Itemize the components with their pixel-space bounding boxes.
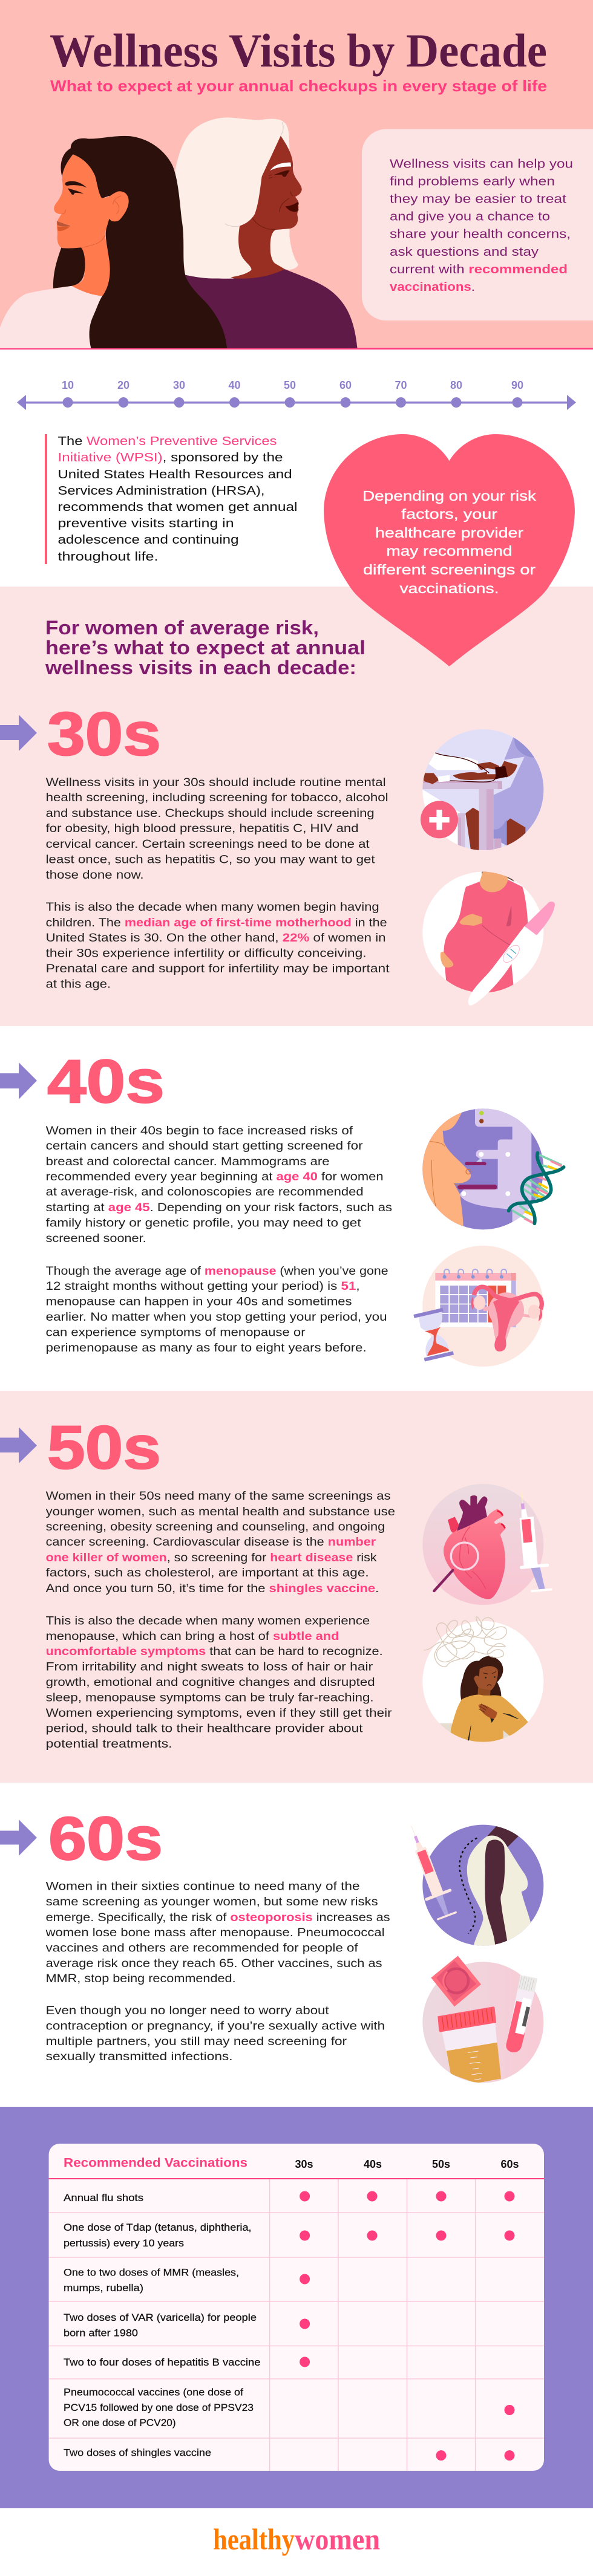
table row labels (64, 2193, 261, 2459)
table row labels: Annual flu shots (64, 2193, 143, 2204)
text block: WPSI recommendation: throughout life. (58, 550, 159, 564)
table row labels: Pneumococcal vaccines (one dose of (64, 2387, 243, 2398)
heading: women of average risk: wellness visits in each decade: (45, 657, 356, 678)
timeline: ages 10 to 90: 50 (284, 379, 296, 391)
text block: 50s paragraph 1: screening, obesity screening and counseling, and ongoing (46, 1521, 385, 1534)
callout panel: wellness visits intro: they may be easier to treat (390, 192, 566, 206)
callout panel: wellness visits intro: and give you a chance to (390, 210, 550, 224)
text block: WPSI recommendation: The Women’s Preventive Services (58, 435, 277, 448)
text block: 60s paragraph 1: vaccines and others are recommended for people of (46, 1942, 358, 1954)
background: intro pink band and 30s section (0, 587, 593, 1026)
text block: 30s paragraph 2 (46, 901, 390, 990)
text block: 60s paragraph 2: contraception or pregnancy, if you’re sexually active with (46, 2020, 385, 2033)
logo: healthywomen (213, 2522, 380, 2556)
background: hero bottom stripe (0, 348, 593, 350)
callout panel: wellness visits intro: share your health concerns, (390, 227, 571, 241)
text block: 40s paragraph 1: breast and colorectal cancer. Mammograms are (46, 1156, 330, 1168)
background: hero section (0, 0, 593, 348)
text block: 50s paragraph 2: Women experiencing symptoms, even if they still get their (46, 1707, 392, 1720)
timeline: ages 10 to 90: 10 (62, 379, 74, 391)
text block: 30s paragraph 2: United States is 30. On the other hand, 22% of women in (46, 932, 386, 945)
text block: 40s paragraph 2: menopause can happen in your 40s and sometimes (46, 1296, 352, 1309)
timeline: ages 10 to 90: 20 (117, 379, 129, 391)
text block: 40s paragraph 1: screened sooner. (46, 1232, 146, 1245)
text block: 60s paragraph 2 (46, 2005, 385, 2063)
background: vaccinations section (0, 2107, 593, 2508)
text block: 40s paragraph 1: at average-risk, and colonoscopies are recommended (46, 1186, 364, 1199)
panel: recommended vaccinations table (49, 2144, 544, 2471)
text block: 30s paragraph 1: least once, such as hepatitis C, so you may want to get (46, 854, 375, 866)
table row labels: Two to four doses of hepatitis B vaccine (64, 2357, 261, 2368)
text block: 30s paragraph 1: for obesity, high blood pressure, hepatitis C, HIV and (46, 822, 359, 835)
timeline: ages 10 to 90: 40 (228, 379, 241, 391)
subtitle: What to expect at your annual checkups in every stage of life (50, 77, 547, 95)
text block: WPSI recommendation: preventive visits starting in (58, 517, 234, 530)
text block: 30s paragraph 1: health screening, including screening for tobacco, alcohol (46, 792, 388, 804)
text block: 60s paragraph 2: sexually transmitted infections. (46, 2051, 233, 2063)
text block: WPSI recommendation: recommends that women get annual (58, 501, 298, 514)
text block: 30s paragraph 2: their 30s experience infertility or difficulty conceiving. (46, 947, 367, 960)
text block: 60s paragraph 1: emerge. Specifically, the risk of osteoporosis increases as (46, 1911, 390, 1924)
text block: 50s paragraph 2: potential treatments. (46, 1738, 172, 1751)
text block: 60s paragraph 1: MMR, stop being recommended. (46, 1973, 236, 1985)
background: 50s section (0, 1391, 593, 1783)
illustration: mammogram and DNA (422, 1108, 564, 1232)
text block: 60s paragraph 1 (45, 1881, 390, 1985)
text block: 50s paragraph 1: cancer screening. Cardiovascular disease is the number (46, 1536, 376, 1549)
callout panel: wellness visits intro: vaccinations . (390, 280, 475, 294)
text block: 60s paragraph 1: same screening as younger women, but some new risks (46, 1896, 378, 1908)
text block: 50s paragraph 2 (46, 1615, 392, 1751)
text block: 30s paragraph 2: Prenatal care and support for infertility may be important (46, 963, 390, 975)
illustration: condom, urine sample and blood tube (422, 1956, 543, 2083)
illustration: spine and syringe (411, 1825, 543, 1946)
callout: heart with risk factors message: different screenings or (363, 562, 536, 577)
text block: 30s paragraph 1: cervical cancer. Certain screenings need to be done at (46, 838, 370, 851)
text block: 50s paragraph 2: From irritability and night sweats to loss of hair or hair (46, 1660, 373, 1673)
text block: 60s paragraph 2: Even though you no longer need to worry about (46, 2005, 329, 2017)
illustration: woman with tangled thoughts (422, 1617, 543, 1745)
logo: healthywomen: healthy (213, 2522, 295, 2556)
callout panel: wellness visits intro: find problems early when (390, 174, 555, 189)
heading: women of average risk: here’s what to expect at annual (45, 637, 365, 659)
text block: 50s paragraph 1 (46, 1490, 395, 1595)
table row labels: pertussis) every 10 years (64, 2238, 184, 2249)
text block: 50s paragraph 2: sleep, menopause symptoms can be truly far-reaching. (46, 1692, 374, 1704)
table dots (300, 2191, 514, 2461)
text block: 50s paragraph 1: one killer of women , so screening for heart disease risk (46, 1552, 377, 1564)
callout panel: wellness visits intro: ask questions and stay (390, 245, 539, 259)
heading: 30s: 30s (47, 700, 161, 768)
text block: 50s paragraph 2: uncomfortable symptoms that can be hard to recognize. (46, 1645, 383, 1658)
text block: 50s paragraph 1: Women in their 50s need many of the same screenings as (46, 1490, 391, 1503)
text block: 50s paragraph 1: And once you turn 50, it’s time for the shingles vaccine . (46, 1582, 379, 1595)
text block: 30s paragraph 1: those done now. (46, 869, 144, 882)
text block: 50s paragraph 1: younger women, such as mental health and substance use (46, 1506, 395, 1518)
text block: WPSI recommendation: Services Administration (HRSA), (58, 484, 265, 498)
callout: heart with risk factors message: healthcare provider (375, 525, 523, 541)
callout: heart with risk factors message: may recommend (386, 543, 512, 559)
text block: 30s paragraph 1: and substance use. Checkups should include screening (46, 807, 375, 820)
timeline: ages 10 to 90: 80 (450, 379, 462, 391)
callout: heart with risk factors message: Depending on your risk (362, 488, 537, 504)
text block: 40s paragraph 1 (46, 1125, 392, 1245)
arrow: 40s (0, 1062, 37, 1099)
title: Wellness Visits by Decade (50, 24, 547, 77)
text block: 40s paragraph 2 (46, 1265, 388, 1355)
text block: 40s paragraph 1: family history or genetic profile, you may need to get (46, 1217, 361, 1230)
table row labels: mumps, rubella) (64, 2283, 143, 2294)
text block: 30s paragraph 2: at this age. (46, 978, 111, 990)
callout: heart with risk factors message: vaccinations. (399, 581, 499, 596)
timeline: ages 10 to 90: 70 (395, 379, 407, 391)
heading: 40s: 40s (47, 1048, 165, 1116)
text block: 50s paragraph 2: growth, emotional and cognitive changes and disrupted (46, 1676, 375, 1689)
heading: women of average risk (45, 617, 365, 678)
text block: WPSI recommendation: United States Health Resources and (58, 468, 292, 481)
table row labels: OR one dose of PCV20) (64, 2418, 176, 2428)
illustration: heart, magnifier and syringe (422, 1484, 552, 1605)
illustration: blood pressure check (421, 729, 552, 853)
callout panel: wellness visits intro (362, 129, 593, 320)
callout: heart with risk factors message: factors, your (401, 506, 497, 522)
illustration: calendar, uterus and hourglass (413, 1246, 543, 1367)
text block: 40s paragraph 2: perimenopause as many as four to eight years before. (46, 1342, 367, 1355)
arrow: 60s (0, 1820, 37, 1856)
text block: 60s paragraph 1: average risk once they reach 65. Other vaccines, such as (46, 1957, 382, 1970)
text block: 30s paragraph 1 (46, 776, 388, 882)
logo: healthywomen: women (295, 2522, 380, 2556)
text block: 30s paragraph 1: Wellness visits in your 30s should include routine mental (46, 776, 386, 789)
text block: 40s paragraph 2: can experience symptoms of menopause or (46, 1327, 306, 1339)
illustration: two women in profile (0, 117, 358, 348)
table header row (64, 2156, 519, 2170)
table header row: 50s (432, 2158, 450, 2170)
text block: 50s paragraph 1: factors, such as cholesterol, are important at this age. (46, 1567, 369, 1579)
table row labels: born after 1980 (64, 2328, 138, 2339)
heading: 60s: 60s (48, 1805, 163, 1873)
callout panel: wellness visits intro: current with recommended (390, 262, 568, 276)
text block: 40s paragraph 1: starting at age 45 . Depending on your risk factors, such as (46, 1202, 392, 1214)
table row labels: One to two doses of MMR (measles, (64, 2268, 239, 2278)
table header row: 60s (500, 2158, 519, 2170)
text block: 30s paragraph 2: This is also the decade when many women begin having (46, 901, 379, 914)
table grid (49, 2179, 544, 2471)
timeline: ages 10 to 90: 60 (339, 379, 352, 391)
text block: 50s paragraph 2: menopause, which can bring a host of subtle and (46, 1630, 339, 1643)
heading: 50s: 50s (47, 1414, 161, 1482)
text block: WPSI recommendation (45, 434, 298, 564)
table header row: 30s (295, 2158, 313, 2170)
arrow: 30s (0, 715, 37, 751)
table row labels: One dose of Tdap (tetanus, diphtheria, (64, 2222, 252, 2233)
table header rule (49, 2178, 544, 2179)
arrow: 50s (0, 1427, 37, 1463)
table row labels: Two doses of shingles vaccine (64, 2448, 211, 2459)
text block: 60s paragraph 1: women lose bone mass after menopause. Pneumococcal (45, 1927, 385, 1939)
table header row: 40s (364, 2158, 382, 2170)
text block: WPSI recommendation: Initiative (WPSI) , sponsored by the (58, 451, 283, 464)
text block: 40s paragraph 1: recommended every year beginning at age 40 for women (46, 1171, 384, 1183)
timeline: ages 10 to 90 (17, 379, 576, 410)
text block: 40s paragraph 2: 12 straight months without getting your period) is 51, (46, 1280, 360, 1293)
text block: 50s paragraph 2: This is also the decade when many women experience (46, 1615, 370, 1628)
heading: women of average risk: For women of average risk, (45, 617, 319, 639)
text block: 50s paragraph 2: period, should talk to their healthcare provider about (46, 1722, 363, 1735)
text block: 40s paragraph 1: certain cancers and should start getting screened for (46, 1140, 363, 1153)
table row labels: Two doses of VAR (varicella) for people (64, 2312, 257, 2323)
text block: 40s paragraph 1: Women in their 40s begin to face increased risks of (46, 1125, 353, 1137)
timeline: ages 10 to 90: 90 (511, 379, 523, 391)
text block: 40s paragraph 2: Though the average age of menopause (when you’ve gone (46, 1265, 388, 1278)
text block: 60s paragraph 1: Women in their sixties continue to need many of the (46, 1881, 360, 1893)
text block: 40s paragraph 2: earlier. No matter when you stop getting your period, you (46, 1311, 387, 1324)
callout: heart with risk factors message (324, 434, 575, 666)
table header row: Recommended Vaccinations (64, 2156, 247, 2170)
text block: WPSI recommendation: adolescence and continuing (58, 533, 238, 547)
text block: 30s paragraph 2: children. The median age of first-time motherhood in the (46, 917, 387, 929)
callout panel: wellness visits intro: Wellness visits can help you (390, 157, 573, 171)
text block: 60s paragraph 2: multiple partners, you still may need screening for (46, 2035, 347, 2048)
illustration: pregnant woman with test (422, 871, 555, 1006)
table row labels: PCV15 followed by one dose of PPSV23 (64, 2402, 254, 2413)
timeline: ages 10 to 90: 30 (173, 379, 185, 391)
